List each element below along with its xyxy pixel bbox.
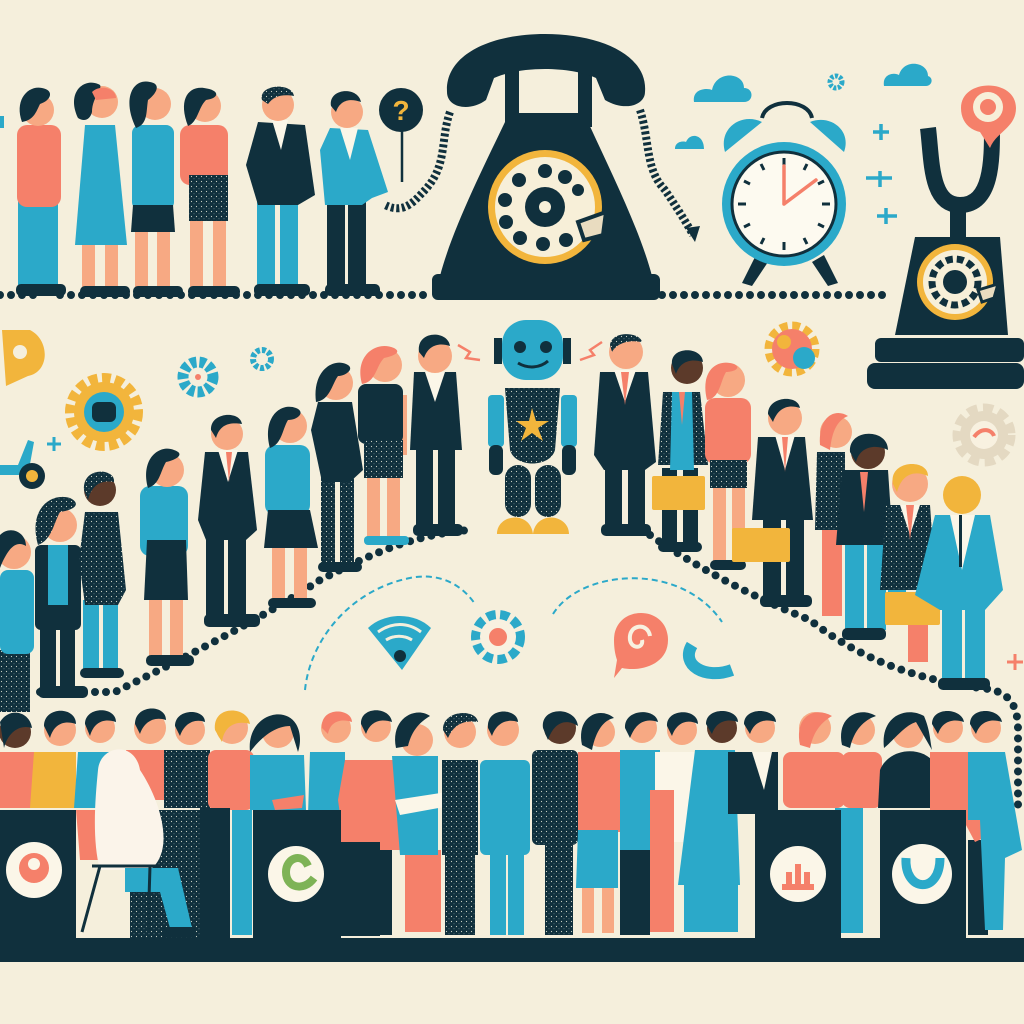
icon: speech bubble xyxy=(614,613,668,678)
phone base upper xyxy=(875,338,1024,362)
person 2 xyxy=(30,711,76,808)
icon: cloud right xyxy=(884,64,932,86)
person 23 xyxy=(968,711,1022,930)
person: black suit angry xyxy=(594,334,656,536)
robot hands xyxy=(489,445,576,475)
bottom row people xyxy=(0,708,1022,935)
icon: location pin xyxy=(961,86,1016,148)
person 13 xyxy=(532,711,578,935)
small teal mark xyxy=(0,116,4,128)
person 22 xyxy=(930,711,1000,935)
arrow: curve right xyxy=(553,578,722,622)
person: black jacket speckled legs xyxy=(311,363,363,572)
phone base lower xyxy=(867,363,1024,389)
clock ticks xyxy=(738,158,830,250)
robot star xyxy=(516,408,549,441)
clock feet xyxy=(742,255,838,286)
arrow: curve left xyxy=(305,577,475,690)
person: man in teal jacket xyxy=(320,91,388,296)
robot left ear xyxy=(494,338,502,364)
zaps xyxy=(458,342,602,360)
person 3 xyxy=(74,710,116,808)
robot feet xyxy=(497,517,569,534)
icon: beige gear xyxy=(960,411,1008,459)
robot legs xyxy=(505,465,561,517)
person: teal top black skirt 2 xyxy=(264,407,318,608)
person: teal dress xyxy=(74,83,130,297)
clock hands xyxy=(784,166,816,204)
rotary dial xyxy=(488,150,606,264)
person: speckled jacket teal legs xyxy=(79,472,126,678)
person: black suit near robot xyxy=(410,335,463,536)
person 19 xyxy=(783,712,863,933)
cradle U xyxy=(928,128,992,205)
floor xyxy=(0,938,1024,962)
top queue path xyxy=(0,291,885,299)
sparkle left xyxy=(47,437,61,451)
person 18 xyxy=(728,711,778,814)
person 4 xyxy=(126,708,168,800)
cradle xyxy=(512,70,585,120)
robot mouth xyxy=(518,361,548,367)
person: dark jacket teal legs xyxy=(836,434,893,640)
middle queue path xyxy=(40,530,1018,810)
phone body xyxy=(440,122,652,276)
person 5 xyxy=(164,712,210,808)
arrow head xyxy=(686,226,700,242)
icon: question bubble: ? xyxy=(392,95,410,126)
icon: question bubble xyxy=(379,88,423,182)
person 12 xyxy=(480,711,530,935)
person: coral top shorts xyxy=(180,88,240,297)
left queue people xyxy=(0,335,463,712)
phone base xyxy=(432,274,660,300)
robot eyes xyxy=(514,341,552,353)
icon: chat bubble left xyxy=(2,330,45,386)
icon: small teal gear xyxy=(253,350,271,368)
rotary telephone xyxy=(385,34,700,300)
person: blond speckled suit xyxy=(880,464,940,662)
top queue people xyxy=(0,82,388,297)
icon: gear xyxy=(478,617,518,657)
handset xyxy=(447,34,645,107)
icon: yellow gear xyxy=(73,381,135,443)
desk 3 xyxy=(253,810,341,938)
person: coral hair black top xyxy=(358,346,409,545)
person 11 xyxy=(442,713,478,935)
icon: cloud xyxy=(694,76,752,102)
desk 4 xyxy=(755,810,841,938)
sparkles xyxy=(866,124,897,224)
person 9 xyxy=(338,710,405,935)
person 15 xyxy=(620,712,660,935)
person 21 xyxy=(878,712,938,808)
phone body xyxy=(895,237,1008,335)
phone cord right xyxy=(640,110,693,235)
person 17 xyxy=(678,711,740,885)
clock bells xyxy=(724,119,846,152)
person: coral legs xyxy=(815,413,852,616)
dial xyxy=(917,244,998,320)
person 14 xyxy=(576,713,620,933)
person: teal top black skirt xyxy=(129,82,183,297)
robot head xyxy=(502,320,563,380)
clock face xyxy=(722,142,846,266)
person: black suit xyxy=(198,415,260,627)
icon: colorful gear xyxy=(771,328,815,370)
person 6 xyxy=(208,710,254,935)
seated person in white xyxy=(76,749,196,937)
icon: scooter xyxy=(0,440,45,489)
person: speckled jacket case xyxy=(652,350,708,552)
clock handle xyxy=(762,103,812,118)
robot xyxy=(458,320,602,534)
desks xyxy=(0,810,966,938)
person 20 xyxy=(841,712,882,808)
right telephone xyxy=(867,128,1024,389)
sparkle right xyxy=(1007,654,1023,670)
person 10 xyxy=(392,713,460,932)
person: teal top black skirt xyxy=(140,449,194,666)
person: teal top speckled legs xyxy=(0,530,34,712)
icon: small cloud xyxy=(675,136,704,149)
person: man in black suit xyxy=(246,87,315,296)
person 7 xyxy=(250,714,306,810)
person 8 xyxy=(308,711,352,815)
person: curly hair dark vest xyxy=(35,497,88,698)
robot right ear xyxy=(563,338,571,364)
icon: wifi xyxy=(368,616,431,670)
person 1 xyxy=(0,713,34,808)
person: teal suit yellow head xyxy=(915,476,1003,690)
person: coral top xyxy=(16,88,66,296)
robot torso xyxy=(505,388,560,464)
icon: small gear xyxy=(830,76,842,88)
bottom row legs xyxy=(200,808,380,938)
alarm clock xyxy=(722,103,846,286)
center network icons xyxy=(305,577,732,690)
right queue people xyxy=(594,334,1023,690)
desk 2 xyxy=(130,810,200,938)
robot arms xyxy=(488,395,577,447)
desk 1 xyxy=(0,810,76,938)
person: coral top shorts right xyxy=(705,363,751,570)
desk 5 xyxy=(880,810,966,938)
person 16 xyxy=(650,712,738,932)
person: black suit case xyxy=(732,399,813,607)
icon: teal gear xyxy=(183,362,213,392)
icon: handset xyxy=(689,645,732,673)
phone cord left xyxy=(385,112,450,208)
